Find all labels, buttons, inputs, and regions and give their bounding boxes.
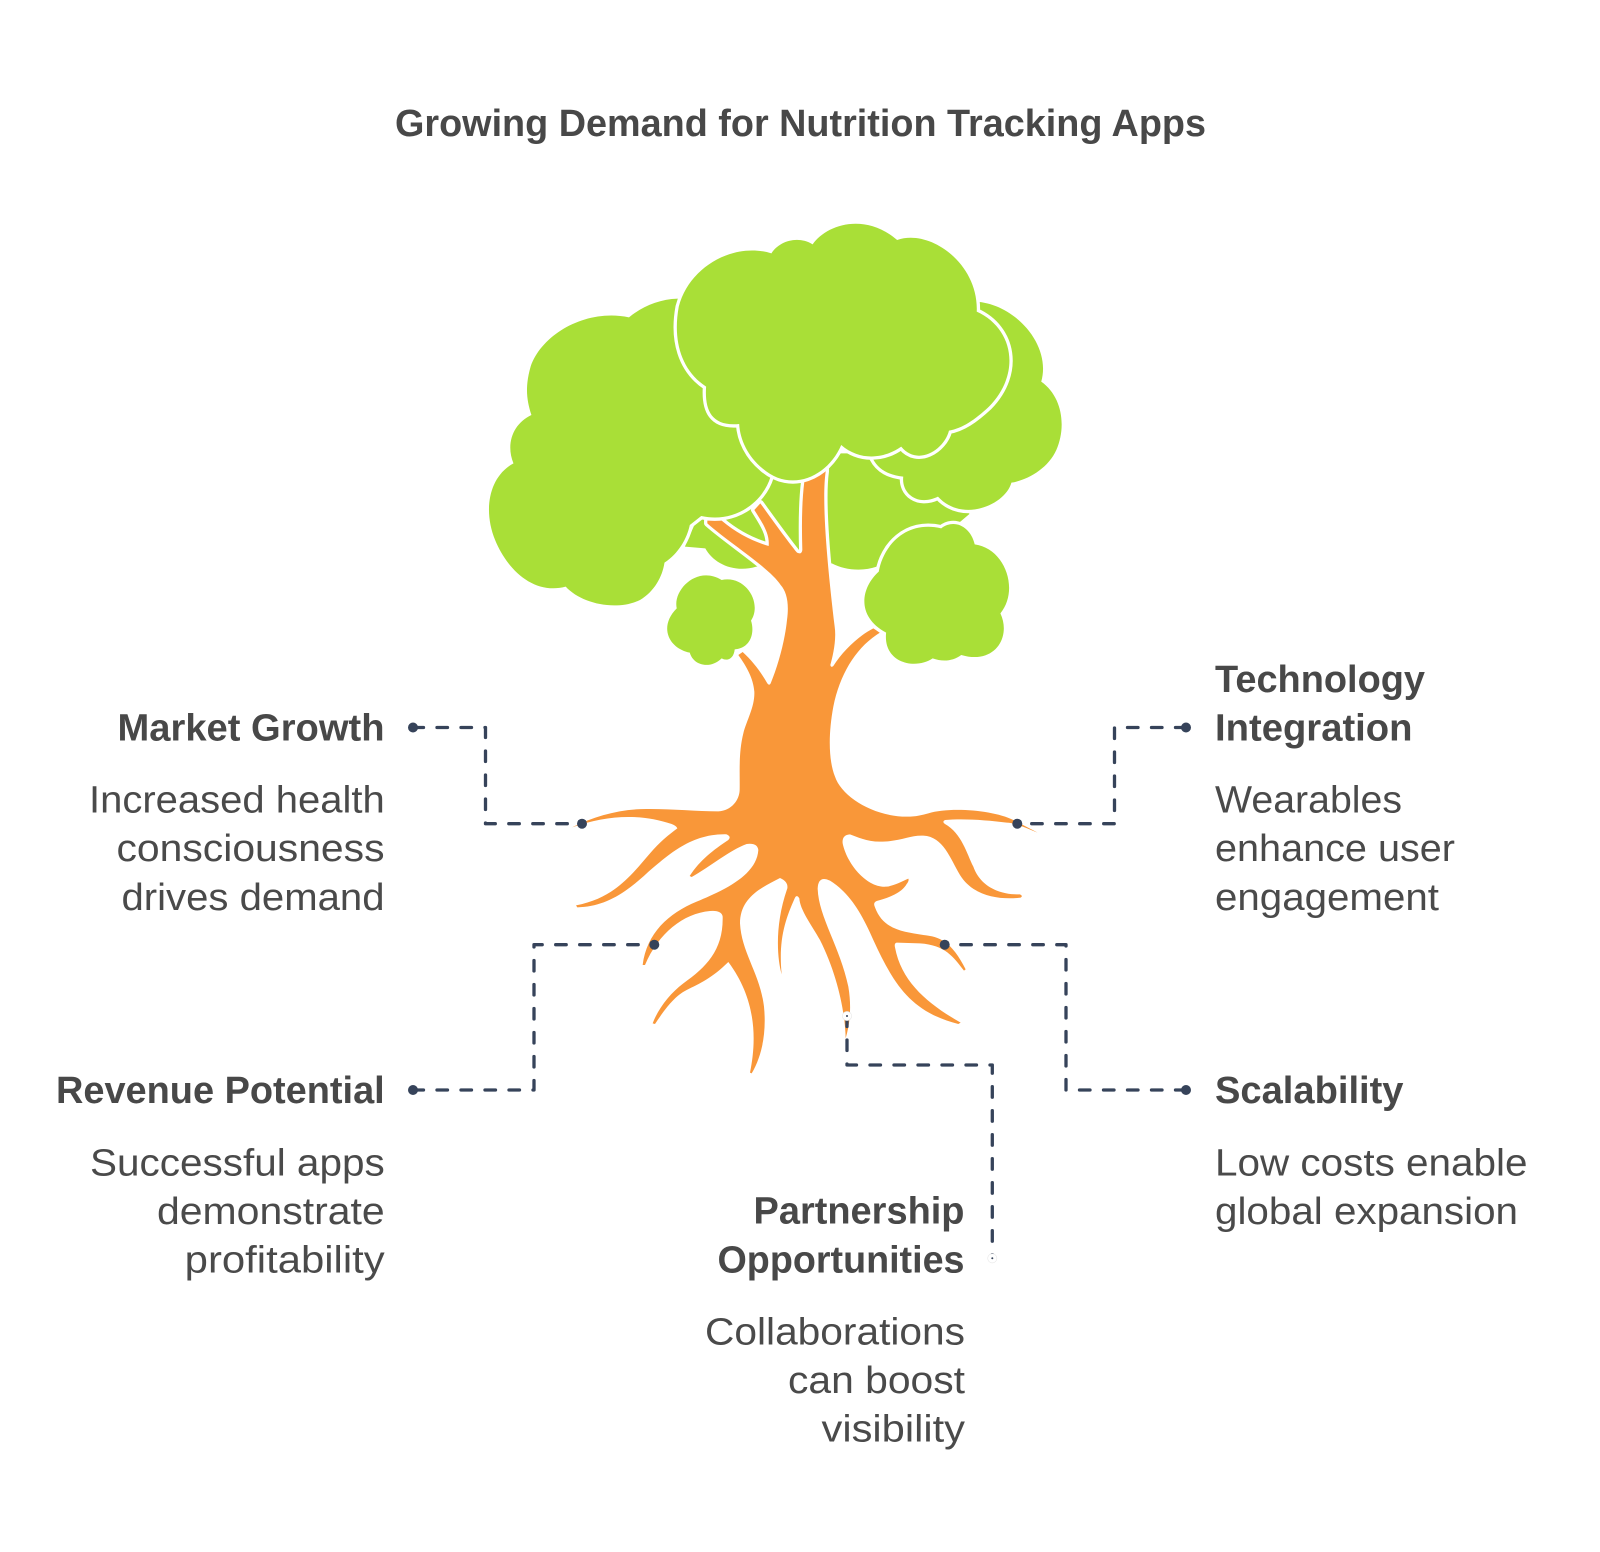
text block: Market Growth: Increased health <box>89 780 385 822</box>
text block: Scalability: global expansion <box>1215 1191 1518 1233</box>
trunk and roots <box>572 453 1038 1073</box>
text block: Scalability <box>1215 1070 1528 1233</box>
icon: tree with canopy and roots <box>489 224 1062 1073</box>
connector: Partnership Opportunities <box>842 1011 997 1263</box>
text block: Partnership Opportunities: Collaborations <box>705 1312 965 1354</box>
text block: Technology Integration: enhance user <box>1215 828 1455 870</box>
text block: Revenue Potential: Successful apps <box>90 1142 385 1184</box>
text block: Market Growth: consciousness <box>116 828 384 870</box>
title: Growing Demand for Nutrition Tracking Apps <box>395 103 1206 145</box>
text block: Technology Integration: Wearables <box>1215 780 1402 822</box>
text block: Technology Integration <box>1215 659 1455 919</box>
canopy: back blob <box>685 453 969 570</box>
canopy: left blob <box>489 299 807 605</box>
text block: Market Growth: drives demand <box>122 877 384 919</box>
canopy: right blob <box>873 302 1062 510</box>
text block: Partnership Opportunities: can boost <box>788 1360 965 1402</box>
canopy: small left blob <box>667 575 755 665</box>
connector: Revenue Potential <box>408 940 659 1095</box>
text block: Scalability: Low costs enable <box>1215 1142 1528 1184</box>
text block: Technology Integration: Technology <box>1215 659 1425 701</box>
text block: Market Growth: Market Growth <box>118 708 384 750</box>
connector: Technology Integration <box>1012 722 1191 829</box>
canopy: small right blob <box>864 524 1009 664</box>
text block: Revenue Potential: Revenue Potential <box>56 1070 385 1112</box>
text block: Partnership Opportunities: visibility <box>822 1409 965 1451</box>
text block: Partnership Opportunities <box>705 1191 965 1451</box>
text block: Market Growth <box>89 708 385 919</box>
connector: Scalability <box>940 940 1191 1095</box>
text block: Revenue Potential: demonstrate <box>157 1191 385 1233</box>
text block: Revenue Potential: profitability <box>185 1239 385 1281</box>
canopy: top blob <box>677 224 1009 480</box>
connector: Market Growth <box>408 722 587 829</box>
text block: Technology Integration: engagement <box>1215 877 1439 919</box>
text block: Technology Integration: Integration <box>1215 708 1412 750</box>
text block: Revenue Potential <box>56 1070 385 1281</box>
text block: Partnership Opportunities: Partnership <box>754 1191 964 1233</box>
text block: Scalability: Scalability <box>1215 1070 1404 1112</box>
text block: Partnership Opportunities: Opportunities <box>718 1239 964 1281</box>
